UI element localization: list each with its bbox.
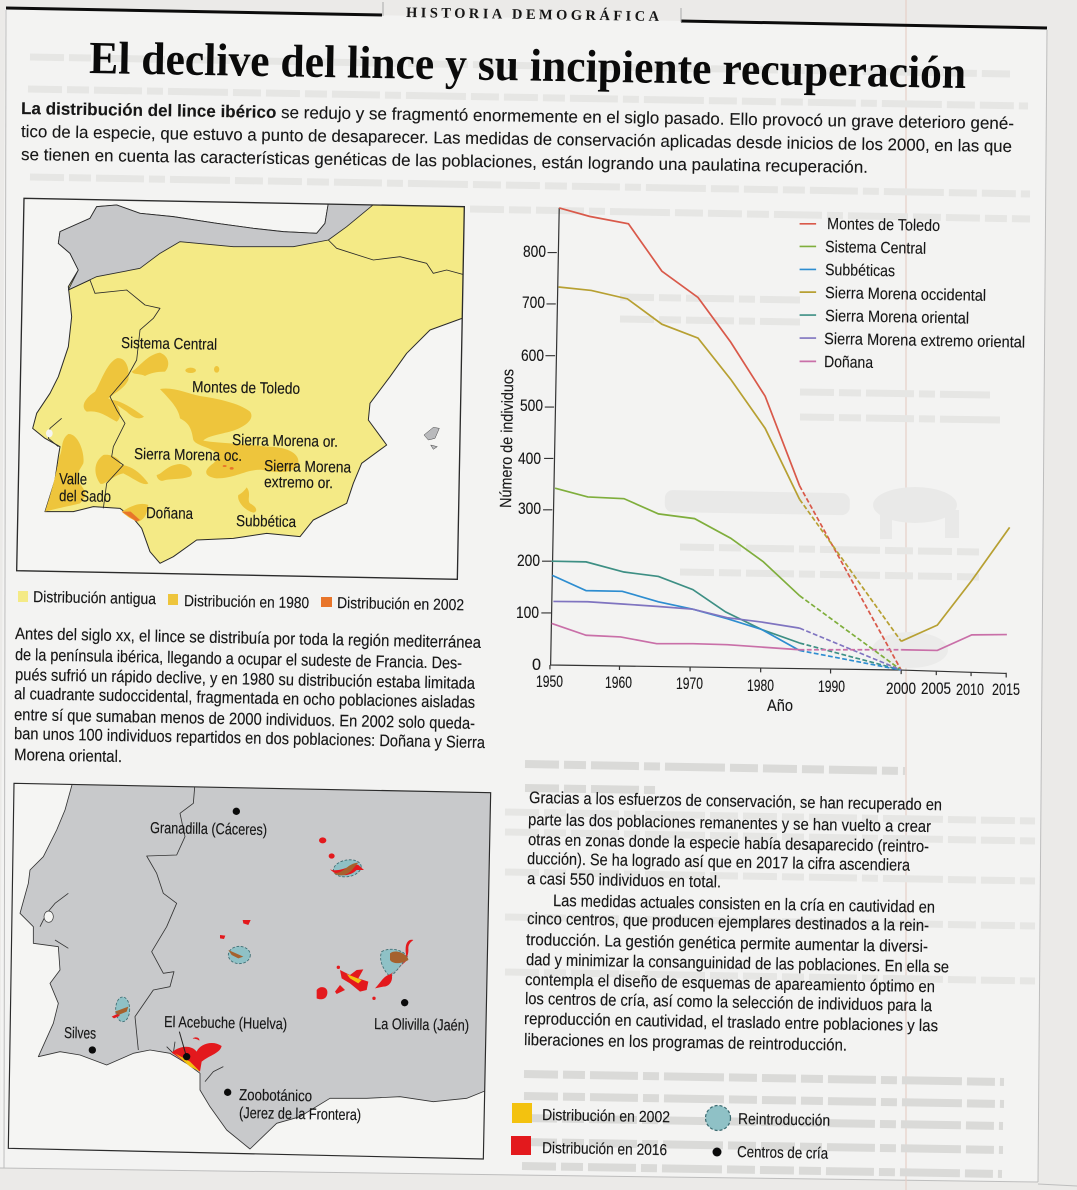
intro text: tico de la especie, que estuvo a punto de desaparecer. Las medidas de conservación aplicadas desde inicios de los 2000, en las que [21,122,1012,156]
centre labels: Granadilla (Cáceres) [150,820,267,839]
centre labels: Silves [64,1025,96,1043]
land [20,780,497,1149]
map labels: Montes de Toledo [192,379,300,398]
paragraph: recovery: cinco centros, que producen ejemplares destinados a la rein- [527,909,929,935]
y tick labels: 600 [521,347,544,365]
map labels: extremo or. [264,474,333,492]
x tick labels: 2000 [886,680,916,698]
y tick labels: 100 [516,604,539,622]
breeding centres [89,808,408,1096]
paragraph: recovery: liberaciones en los programas de reintroducción. [524,1030,847,1055]
paragraph: recovery: contempla el diseño de esquemas de apareamiento óptimo en [525,970,935,996]
series: Doñana [552,623,1007,650]
legend: map 1: Distribución en 2002 [337,595,464,614]
centre labels: El Acebuche (Huelva) [164,1014,287,1033]
paragraph: recovery: ducción). Se ha logrado así que en 2017 la cifra ascendiera [527,849,911,875]
intro text: se tienen en cuenta las características genéticas de las poblaciones, están logrando una paulatina recuperación. [21,145,868,177]
2002 patches [122,465,234,522]
gray region [58,203,375,290]
legend: map 2 [511,1103,830,1163]
intro text: La distribución del lince ibérico se redujo y se fragmentó enormemente en el siglo pasado. Ello provocó un grave deterioro gené- [21,99,1014,133]
legend: map 2: Reintroducción [738,1111,830,1130]
legend: map 2: Centros de cría [737,1144,828,1163]
x tick labels: 1970 [676,675,703,693]
series: Sierra Morena extremo oriental [553,601,901,670]
x tick labels: 1990 [818,678,845,696]
legend: map 2: Distribución en 2002 [542,1107,670,1126]
series: Sierra Morena occidental [559,287,1010,641]
title: El declive del lince y su incipiente recuperación [89,32,967,98]
land: antigua distribution [33,203,467,563]
paragraph: historic decline: al cuadrante sudoccidental, fragmentada en ocho poblaciones aisladas [14,684,475,712]
header rule right [681,21,1047,28]
x tick labels: 1960 [605,674,632,692]
x tick labels: 2005 [921,680,951,698]
1980 patches [45,353,298,522]
chart legend labels: Sierra Morena extremo oriental [824,330,1025,352]
x tick labels: 2015 [992,681,1020,699]
chart legend labels: Subbéticas [825,261,895,280]
chart legend labels: Montes de Toledo [827,215,940,235]
intro text [21,99,1014,177]
centre labels: Zoobotánico [239,1087,312,1105]
x axis title: Año [767,697,793,715]
series: Sistema Central [555,488,901,670]
y tick labels: 700 [522,294,545,312]
paragraph: recovery: parte las dos poblaciones remanentes y se han vuelto a crear [528,810,932,836]
y tick labels: 800 [523,243,546,261]
paragraph: recovery: reproducción en cautividad, el traslado entre poblaciones y las [524,1009,938,1035]
section label: HISTORIA DEMOGRÁFICA [406,4,660,25]
map: historic distribution of the Iberian lynx [17,198,467,579]
paragraph: historic decline: ban unos 100 individuos repartidos en dos poblaciones: Doñana y Sierra [14,724,486,752]
paragraph: historic decline: pués sufrió un rápido declive, y en 1980 su distribución estaba limitada [15,665,476,693]
map labels [59,335,351,531]
x tick labels: 1980 [747,677,774,695]
centre labels [64,820,469,1124]
centre labels: (Jerez de la Frontera) [239,1105,361,1124]
paragraph: historic decline: Morena oriental. [14,745,122,766]
map labels: Sierra Morena [264,458,351,477]
2016 distribution [112,837,413,1072]
paragraph: recovery: otras en zonas donde la especie había desaparecido (reintro- [528,830,929,856]
map labels: del Sado [59,488,111,506]
x tick labels: 2010 [956,681,984,699]
borders [48,240,465,508]
paragraph: recovery: a casi 550 individuos en total. [527,869,721,891]
chart legend labels [824,215,1025,372]
legend: map 1 [18,589,464,614]
paragraph: recovery [524,788,949,1055]
y tick labels: 0 [532,656,541,674]
pointer [179,1032,186,1055]
map labels: Doñana [146,505,193,523]
map labels: Valle [59,471,87,488]
y tick labels: 400 [518,450,541,468]
series: Subbéticas [552,575,901,670]
map labels: Sierra Morena oc. [134,446,242,465]
x tick labels: 1950 [536,673,563,691]
map labels: Sierra Morena or. [232,432,338,451]
paragraph: recovery: dad y minimizar la consanguinidad de las poblaciones. En ella se [526,950,949,976]
y tick labels [516,243,546,674]
series: Montes de Toledo [559,208,901,670]
legend: map 1: Distribución en 1980 [184,593,309,612]
paragraph: recovery: Las medidas actuales consisten en la cría en cautividad en [553,891,935,917]
y tick labels: 200 [517,552,540,570]
map: current distribution and breeding centres [8,780,497,1159]
chart legend labels: Sierra Morena occidental [825,284,986,305]
chart legend labels: Sierra Morena oriental [825,307,969,328]
paragraph: historic decline: entre sí que sumaban menos de 2000 individuos. En 2002 solo queda- [14,705,475,733]
centre labels: La Olivilla (Jaén) [374,1016,469,1035]
header rule left [6,8,382,15]
y tick labels: 300 [518,500,541,518]
overlap [115,863,408,1015]
2002 distribution [175,974,362,1072]
paragraph: historic decline: de la península ibérica, llegando a ocupar el sudeste de Francia. Des- [15,645,462,673]
borders and rivers [40,783,223,1082]
island [424,427,439,449]
paragraph: historic decline [14,624,486,766]
y axis title: Número de individuos [497,369,517,508]
legend: map 1: Distribución antigua [33,589,156,608]
legend lines [800,224,816,361]
chart legend labels: Doñana [824,353,873,372]
y tick labels: 500 [520,397,543,415]
chart legend labels: Sistema Central [825,238,926,258]
paragraph: recovery: Gracias a los esfuerzos de conservación, se han recuperado en [529,788,942,814]
paragraph: historic decline: Antes del siglo xx, el lince se distribuía por toda la región mediterránea [15,624,482,652]
series: Sierra Morena oriental [552,561,901,670]
paragraph: recovery: troducción. La gestión genética permite aumentar la diversi- [526,930,928,956]
reintroduction areas [116,858,407,1022]
map labels: Sistema Central [121,335,217,354]
axes [541,208,1006,677]
line chart: population by year [497,208,1025,715]
map labels: Subbética [236,513,296,531]
x tick labels [536,673,1020,699]
legend: map 2: Distribución en 2016 [542,1140,667,1159]
paragraph: recovery: los centros de cría, así como la selección de individuos para la [525,989,933,1015]
